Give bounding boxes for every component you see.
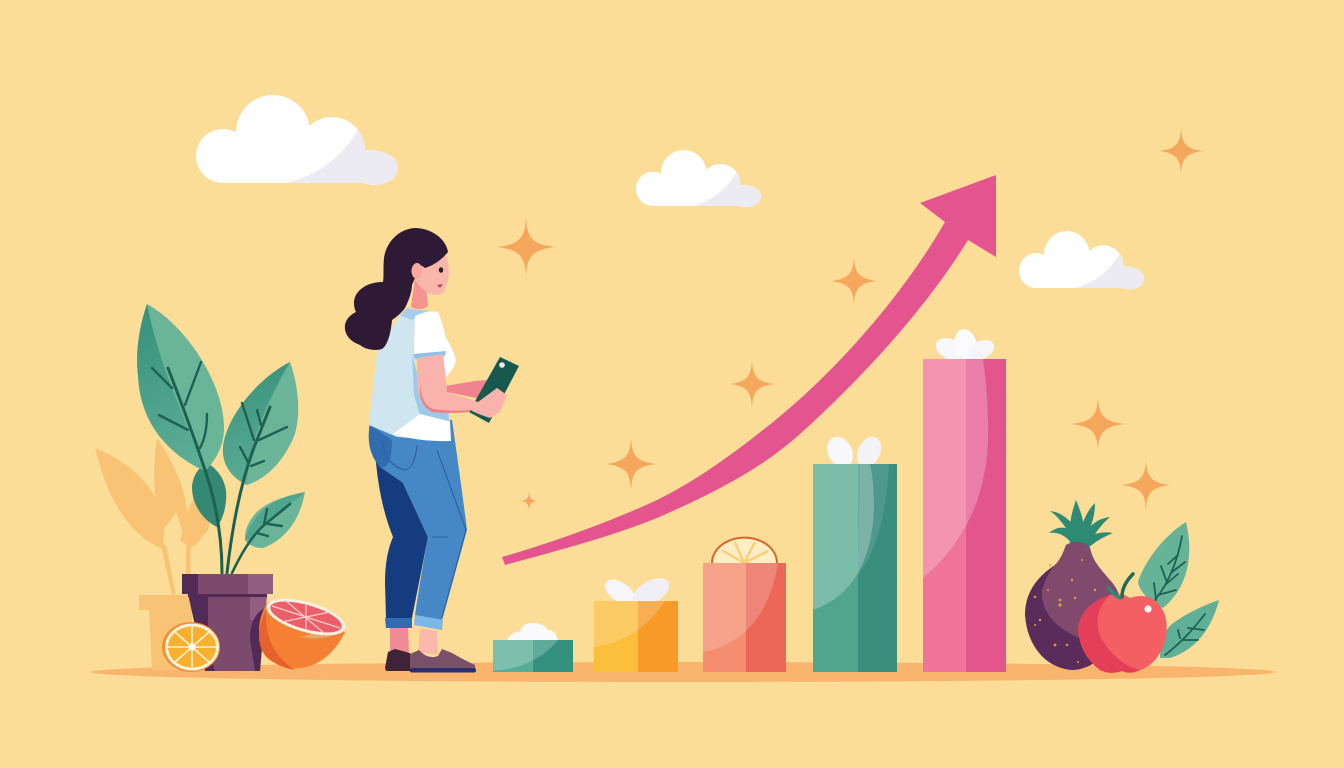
growth arrow xyxy=(502,175,996,565)
collar xyxy=(400,308,430,320)
jeans: front leg xyxy=(369,420,467,620)
phone xyxy=(469,357,519,423)
leaf: lower right xyxy=(1160,600,1219,658)
leaf: large xyxy=(137,304,224,471)
bar 1 xyxy=(493,623,573,672)
apple xyxy=(1078,594,1167,673)
citrus slice xyxy=(162,622,220,672)
shoes xyxy=(385,649,414,671)
bar 5 xyxy=(923,327,1006,672)
bar 3 xyxy=(703,537,786,672)
pot xyxy=(188,594,267,671)
grapefruit half xyxy=(259,591,350,670)
neck xyxy=(411,278,428,309)
cloud: middle xyxy=(636,150,766,207)
illustration scene xyxy=(91,95,1275,682)
ankles xyxy=(390,628,409,652)
sparkles xyxy=(497,128,1203,511)
back leg xyxy=(375,450,428,618)
fruit group right xyxy=(1025,500,1219,673)
face xyxy=(415,250,449,295)
leaf: small dark xyxy=(192,463,226,527)
shirt back xyxy=(369,315,450,441)
leaf: second xyxy=(223,362,298,485)
hair xyxy=(345,228,448,350)
eye xyxy=(439,267,443,273)
chest xyxy=(440,330,456,378)
cloud: left xyxy=(196,95,406,185)
potted plant xyxy=(137,304,305,671)
shirt front lower xyxy=(393,414,451,441)
sleeve xyxy=(414,312,447,355)
ground shadow xyxy=(91,662,1275,682)
purple fruit xyxy=(1025,542,1122,670)
ear xyxy=(412,263,422,279)
bar 4 xyxy=(813,432,897,672)
far arm xyxy=(445,380,489,399)
cloud: right xyxy=(1019,231,1149,289)
cuffs xyxy=(385,618,412,628)
bar 2 xyxy=(594,572,678,672)
stems and veins xyxy=(152,362,290,573)
near arm xyxy=(417,354,507,418)
person xyxy=(345,228,519,672)
pineapple crown xyxy=(1049,500,1113,548)
highlight xyxy=(1144,605,1152,613)
mouth xyxy=(437,284,443,288)
leaf: upper right xyxy=(1138,522,1189,608)
background plant silhouette xyxy=(95,438,211,670)
apple stem xyxy=(1122,574,1133,597)
leaf: lower right xyxy=(245,492,305,548)
